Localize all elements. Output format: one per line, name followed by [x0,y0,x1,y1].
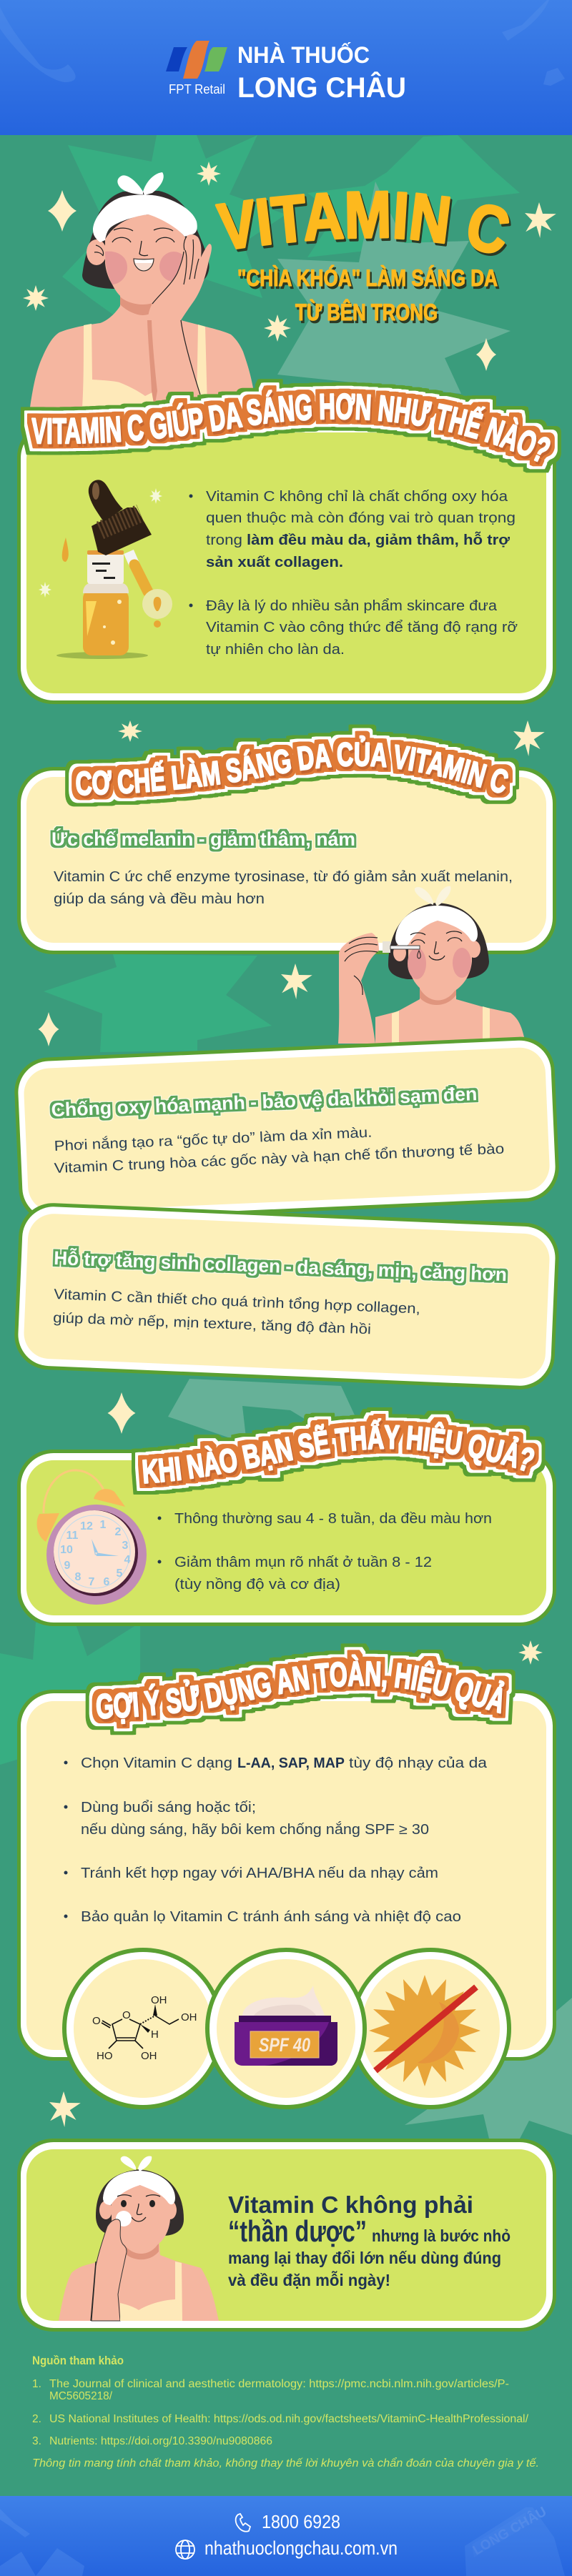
closing text: mang lại thay đổi lớn nếu dùng đúng [228,2249,501,2267]
illustration: girl applying serum [338,886,526,1044]
closing text: “thần dược” [228,2214,367,2248]
sub-heading: Ức chế melanin - giảm thâm, nám [51,828,355,850]
panel: how vitamin C brightens [17,379,561,704]
bullet list: L-AA, SAP, MAP [237,1755,345,1771]
body line 1: Phơi nắng tạo ra “gốc tự do” làm da xỉn màu. [54,1124,373,1154]
body line 2: Vitamin C trung hòa các gốc này và hạn chế tổn thương tế bào [54,1141,505,1176]
atom labels: HO [97,2050,113,2062]
clock numbers: 3 [122,1540,129,1552]
illustration: girl touching cheek [30,172,256,407]
references: Nguồn tham khảo [32,2354,124,2367]
illustration: girl with cotton pad [59,2156,219,2321]
atom labels: O [122,2009,131,2021]
bullet text 1: trong [206,532,242,548]
bullet text [157,1511,492,1592]
body text [54,869,513,907]
title [214,190,511,325]
heading: CƠ CHẾ LÀM SÁNG DA CỦA VITAMIN C [65,725,519,806]
sub-heading: Chống oxy hóa mạnh - bảo vệ da khỏi sạm đen [51,1083,478,1121]
footer decoration: storefront: LONG CHÂU [470,2504,549,2558]
icon: alarm clock [37,1470,147,1605]
bullet text 1: sản xuất collagen. [206,555,343,570]
body line 2: giúp da mờ nếp, mịn texture, tăng độ đàn hồi [53,1310,371,1337]
bullet list: Chọn Vitamin C dạng [81,1755,232,1771]
references: MC5605218/ [49,2390,113,2402]
atom labels: O [92,2015,101,2027]
brand name: LONG CHÂU [237,71,406,104]
references: 2. [32,2413,41,2425]
bullet list: nếu dùng sáng, hãy bôi kem chống nắng SPF ≥ 30 [81,1821,429,1838]
panel: when you will see results [17,1407,556,1626]
panel: mechanism, melanin [17,725,556,954]
website: nhathuoclongchau.com.vn [204,2537,398,2559]
footer band [0,2496,572,2576]
clock numbers: 2 [115,1526,122,1538]
antioxidant text [51,1083,505,1176]
clock numbers: 7 [89,1576,95,1588]
phone: 1800 6928 [262,2511,340,2532]
clock numbers: 12 [80,1520,93,1532]
phone [236,2511,340,2532]
bullet text 1 [189,489,516,570]
header decoration [0,0,565,86]
clock numbers: 4 [124,1554,131,1566]
clock numbers [60,1519,131,1588]
icon: SPF 40 cream jar: SPF 40 [259,2034,310,2056]
closing text [228,2191,511,2289]
heading: KHI NÀO BẠN SẼ THẤY HIỆU QUẢ? [132,1407,545,1495]
icon: serum bottle with dropper [39,480,172,659]
clock numbers: 6 [104,1576,110,1588]
bullet text: Thông thường sau 4 - 8 tuần, da đều màu hơn [174,1511,492,1527]
panel: antioxidant [13,1036,561,1224]
FPT logo: FPT Retail [169,82,225,96]
bullet text 2: tự nhiên cho làn da. [206,642,345,658]
clock numbers: 1 [100,1519,107,1531]
title: "CHÌA KHÓA" LÀM SÁNG DA [237,265,498,291]
bullet text 1: Vitamin C không chỉ là chất chống oxy hóa [206,489,508,505]
references: Nutrients: https://doi.org/10.3390/nu9080866 [49,2435,272,2447]
bullet list: Tránh kết hợp ngay với AHA/BHA nếu da nhạy cảm [81,1866,438,1881]
FPT logo [166,41,227,96]
bullet text 2: Vitamin C vào công thức để tăng độ rạng rỡ [206,620,518,635]
bullet text 2: Đây là lý do nhiều sản phẩm skincare đưa [206,598,498,614]
closing text: nhưng là bước nhỏ [372,2226,511,2245]
references [32,2354,539,2470]
bullet text: (tùy nồng độ và cơ địa) [174,1577,340,1592]
atom labels [92,1994,197,2062]
references: The Journal of clinical and aesthetic dermatology: https://pmc.ncbi.nlm.nih.gov/articles/P- [49,2378,509,2390]
clock numbers: 10 [60,1544,73,1556]
brand name: NHÀ THUỐC [237,42,370,68]
icon: ascorbic acid molecule [62,1948,224,2109]
atom labels: OH [141,2050,157,2062]
bullet text 1: quen thuộc mà còn đóng vai trò quan trọng [206,510,516,526]
collagen text [53,1247,507,1337]
panel: closing message [17,2139,556,2332]
bullet text 2 [189,598,518,658]
title: VITAMIN C [214,190,511,256]
decorative stars, hero [23,162,556,371]
heading: VITAMIN C GIÚP DA SÁNG HƠN NHƯ THẾ NÀO? [20,379,561,473]
header band [0,0,572,135]
background starbursts [0,135,572,2139]
body line 1: Vitamin C cần thiết cho quá trình tổng hợp collagen, [54,1287,420,1317]
clock numbers: 9 [64,1560,71,1572]
heading: GỢI Ý SỬ DỤNG AN TOÀN, HIỆU QUẢ [86,1643,516,1735]
icon: SPF 40 cream jar [205,1948,367,2109]
brand name [237,42,406,104]
references: Thông tin mang tính chất tham khảo, không thay thế lời khuyên và chẩn đoán của chuyên gia y tế. [32,2457,539,2470]
title: TỪ BÊN TRONG [295,299,438,325]
references: 1. [32,2378,41,2390]
decorative stars, lower [49,1392,543,2127]
clock numbers: 8 [75,1571,82,1583]
atom labels: H [151,2028,159,2041]
icon: no sun [350,1948,511,2109]
references: US National Institutes of Health: https://ods.od.nih.gov/factsheets/VitaminC-HealthProfessional/ [49,2413,529,2425]
body text: Vitamin C ức chế enzyme tyrosinase, từ đó giảm sản xuất melanin, [54,869,513,885]
bullet list [64,1755,488,1925]
clock numbers: 5 [117,1567,123,1580]
panel: safe use suggestions [17,1643,556,2061]
decorative stars, middle [39,720,545,1046]
references: 3. [32,2435,41,2447]
sub-heading: Hỗ trợ tăng sinh collagen - da sáng, mịn, căng hơn [54,1247,507,1285]
bullet list: Dùng buổi sáng hoặc tối; [81,1800,256,1815]
bullet text 1: làm đều màu da, giảm thâm, hỗ trợ [247,531,511,548]
clock numbers: 11 [66,1530,79,1542]
atom labels: OH [181,2011,197,2023]
bullet list: Bảo quản lọ Vitamin C tránh ánh sáng và nhiệt độ cao [81,1909,461,1925]
closing text: Vitamin C không phải [228,2191,473,2218]
bullet text: Giảm thâm mụn rõ nhất ở tuần 8 - 12 [174,1555,432,1570]
panel: collagen [13,1202,561,1391]
bullet list: tùy độ nhạy của da [349,1755,488,1771]
body text: giúp da sáng và đều màu hơn [54,891,265,907]
atom labels: OH [151,1994,167,2006]
footer decoration: storefront [0,2504,565,2576]
closing text: và đều đặn mỗi ngày! [228,2270,390,2289]
